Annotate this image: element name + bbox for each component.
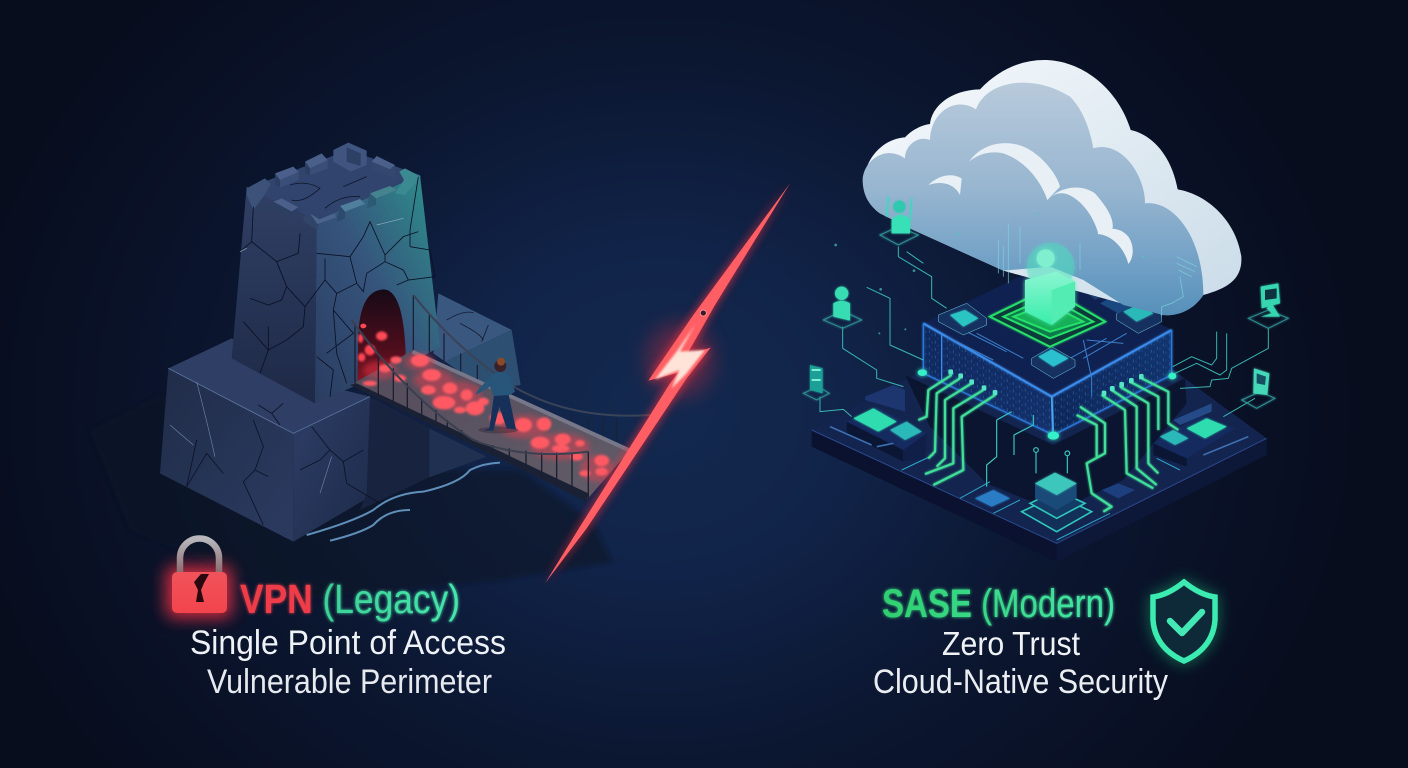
bridge [350, 295, 650, 502]
icon: device node far left [803, 365, 829, 400]
gate arch [357, 289, 406, 387]
bridge deck [353, 350, 630, 500]
bolt glow [545, 183, 790, 583]
front chip tile [975, 490, 1010, 507]
icon: green shield with check [1151, 579, 1217, 664]
trace terminals [948, 369, 1144, 396]
teal lower connectors [987, 412, 1070, 487]
text: Vulnerable Perimeter: Vulnerable Perimeter [207, 663, 492, 701]
floating sparks [834, 212, 1145, 334]
top chip tiles [938, 277, 1162, 378]
left module [830, 407, 927, 462]
icon: user node left [823, 287, 862, 328]
user figure on pad [1025, 243, 1075, 325]
bolt highlight [655, 325, 705, 388]
fortress base block [160, 338, 487, 542]
cloud highlights [928, 143, 1133, 264]
cloud data sparks [998, 223, 1197, 317]
board modules [830, 385, 1248, 540]
battlements [247, 143, 421, 230]
heading: VPN (Legacy): VPN (Legacy) [240, 576, 460, 622]
stacked chip [1022, 473, 1092, 532]
glowing red stones [363, 353, 613, 482]
bolt body [545, 183, 790, 583]
network links [820, 247, 1268, 417]
caption: VPN legacy [166, 538, 506, 701]
far rail [413, 295, 650, 447]
cloud [863, 60, 1241, 317]
near rail [352, 320, 588, 500]
fortress back block [433, 293, 521, 390]
illustration: SASE cloud and secure platform [803, 60, 1288, 562]
circuit board platform [812, 370, 1267, 562]
text: Zero Trust: Zero Trust [942, 625, 1080, 662]
person on bridge [476, 358, 518, 433]
tower cracks [240, 177, 435, 397]
ground shadow under fortress [90, 395, 612, 600]
heading: SASE (Modern): SASE (Modern) [882, 582, 1115, 626]
text: Cloud-Native Security: Cloud-Native Security [873, 663, 1168, 701]
lightning bolt divider [545, 183, 790, 583]
green circuit traces [918, 375, 1178, 512]
cloud face [863, 83, 1203, 315]
corner nodes [918, 369, 1176, 440]
cracked ground crevice [307, 463, 500, 541]
board lines [902, 455, 1180, 540]
fortress tower [232, 143, 440, 403]
bolt spark [700, 310, 706, 316]
server top circuitry [947, 330, 1127, 397]
icon: user node upper left [880, 197, 918, 245]
icon: tablet node right [1242, 368, 1275, 408]
left top module [865, 385, 905, 412]
right module [1153, 403, 1248, 467]
text: Single Point of Access: Single Point of Access [190, 624, 506, 662]
core shadow wall [905, 375, 1187, 512]
caption: SASE modern [873, 579, 1217, 701]
icon: camera node right [1248, 283, 1288, 328]
illustration: cracked fortress and bridge [160, 143, 650, 542]
secure server core [918, 263, 1176, 440]
icon: broken red padlock [166, 538, 232, 618]
cloud rim [864, 60, 1241, 315]
emerald pad [990, 288, 1105, 347]
